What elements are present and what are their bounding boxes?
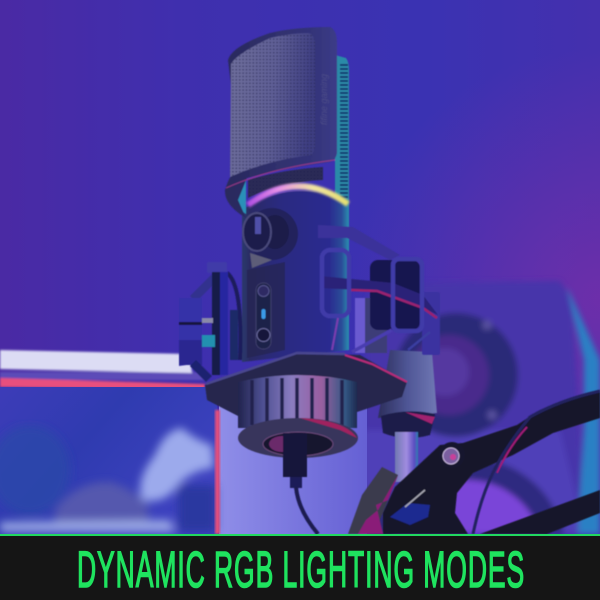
title text: DYNAMIC RGB LIGHTING MODES (77, 541, 524, 598)
arm joint screw (439, 442, 465, 468)
gear ring (238, 375, 357, 428)
clip block (370, 260, 420, 330)
cage frames (322, 250, 422, 331)
microphone body (233, 167, 349, 362)
rear mesh of microphone (335, 55, 349, 200)
logo on pop filter: fifine gaming (319, 74, 329, 125)
right elastic tab (422, 292, 440, 355)
monitor screen (0, 387, 217, 534)
metal grille (230, 33, 315, 177)
boom arm (348, 390, 600, 534)
control strip with jack and LED (247, 262, 285, 358)
screen right edge light (215, 410, 220, 534)
lower arm (480, 490, 600, 534)
bottom ring with USB port (238, 418, 358, 458)
elastic ring band (320, 276, 438, 315)
control knob (243, 208, 298, 268)
base plate (205, 353, 407, 416)
top bracket (318, 225, 400, 260)
thin cable (473, 391, 600, 534)
cyan reflection inside band (233, 178, 246, 214)
microphone assembly (179, 27, 440, 534)
monitor upper bezel (0, 350, 205, 390)
blurred clouds (0, 425, 216, 532)
shock mount left clip (179, 262, 240, 382)
upper arm body (383, 390, 600, 534)
blue reflection (390, 503, 430, 525)
shock mount right cage (318, 225, 440, 355)
RGB light ring (248, 186, 348, 205)
USB cable (283, 433, 318, 534)
lower mesh window (248, 167, 323, 198)
pop filter (225, 27, 337, 218)
blurred monitor with cloud wallpaper (0, 350, 220, 534)
bottom title banner (0, 534, 600, 600)
wall behind monitor (219, 400, 367, 534)
blurred studio monitor speaker (360, 281, 600, 534)
left fork (348, 467, 398, 534)
stand mount under cage (355, 298, 437, 482)
